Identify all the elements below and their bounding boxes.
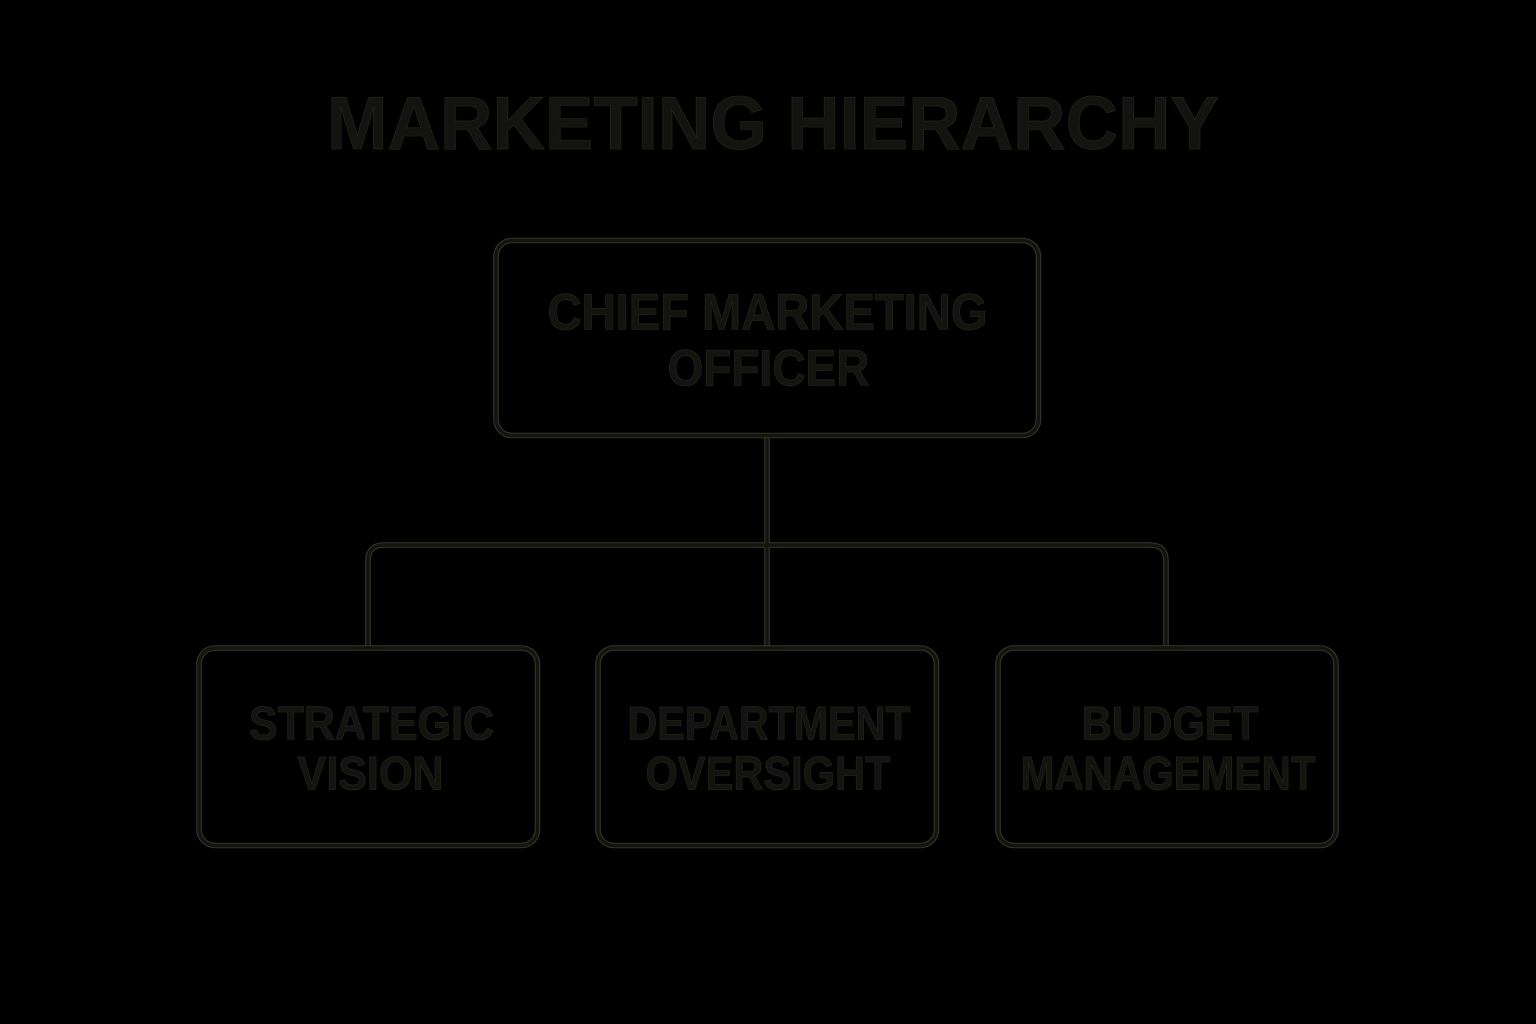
- box: department oversight: [598, 648, 936, 846]
- title: MARKETING HIERARCHY: [327, 81, 1219, 165]
- label: budget management: [1020, 696, 1316, 800]
- box: strategic vision: [199, 648, 538, 846]
- connector lines: [368, 437, 1166, 646]
- box: budget management: [998, 648, 1336, 846]
- label: department oversight: OVERSIGHT: [646, 746, 891, 800]
- label: budget management: BUDGET: [1082, 696, 1259, 750]
- label: chief marketing officer: [548, 284, 988, 396]
- label: chief marketing officer: CHIEF MARKETING: [548, 284, 988, 340]
- label: strategic vision: STRATEGIC: [249, 696, 494, 750]
- box: chief marketing officer: [496, 240, 1038, 436]
- label: budget management: MANAGEMENT: [1020, 746, 1316, 800]
- label: strategic vision: [249, 696, 494, 800]
- label: department oversight: [628, 696, 911, 800]
- label: department oversight: DEPARTMENT: [628, 696, 911, 750]
- label: strategic vision: VISION: [298, 746, 444, 800]
- label: chief marketing officer: OFFICER: [668, 340, 870, 396]
